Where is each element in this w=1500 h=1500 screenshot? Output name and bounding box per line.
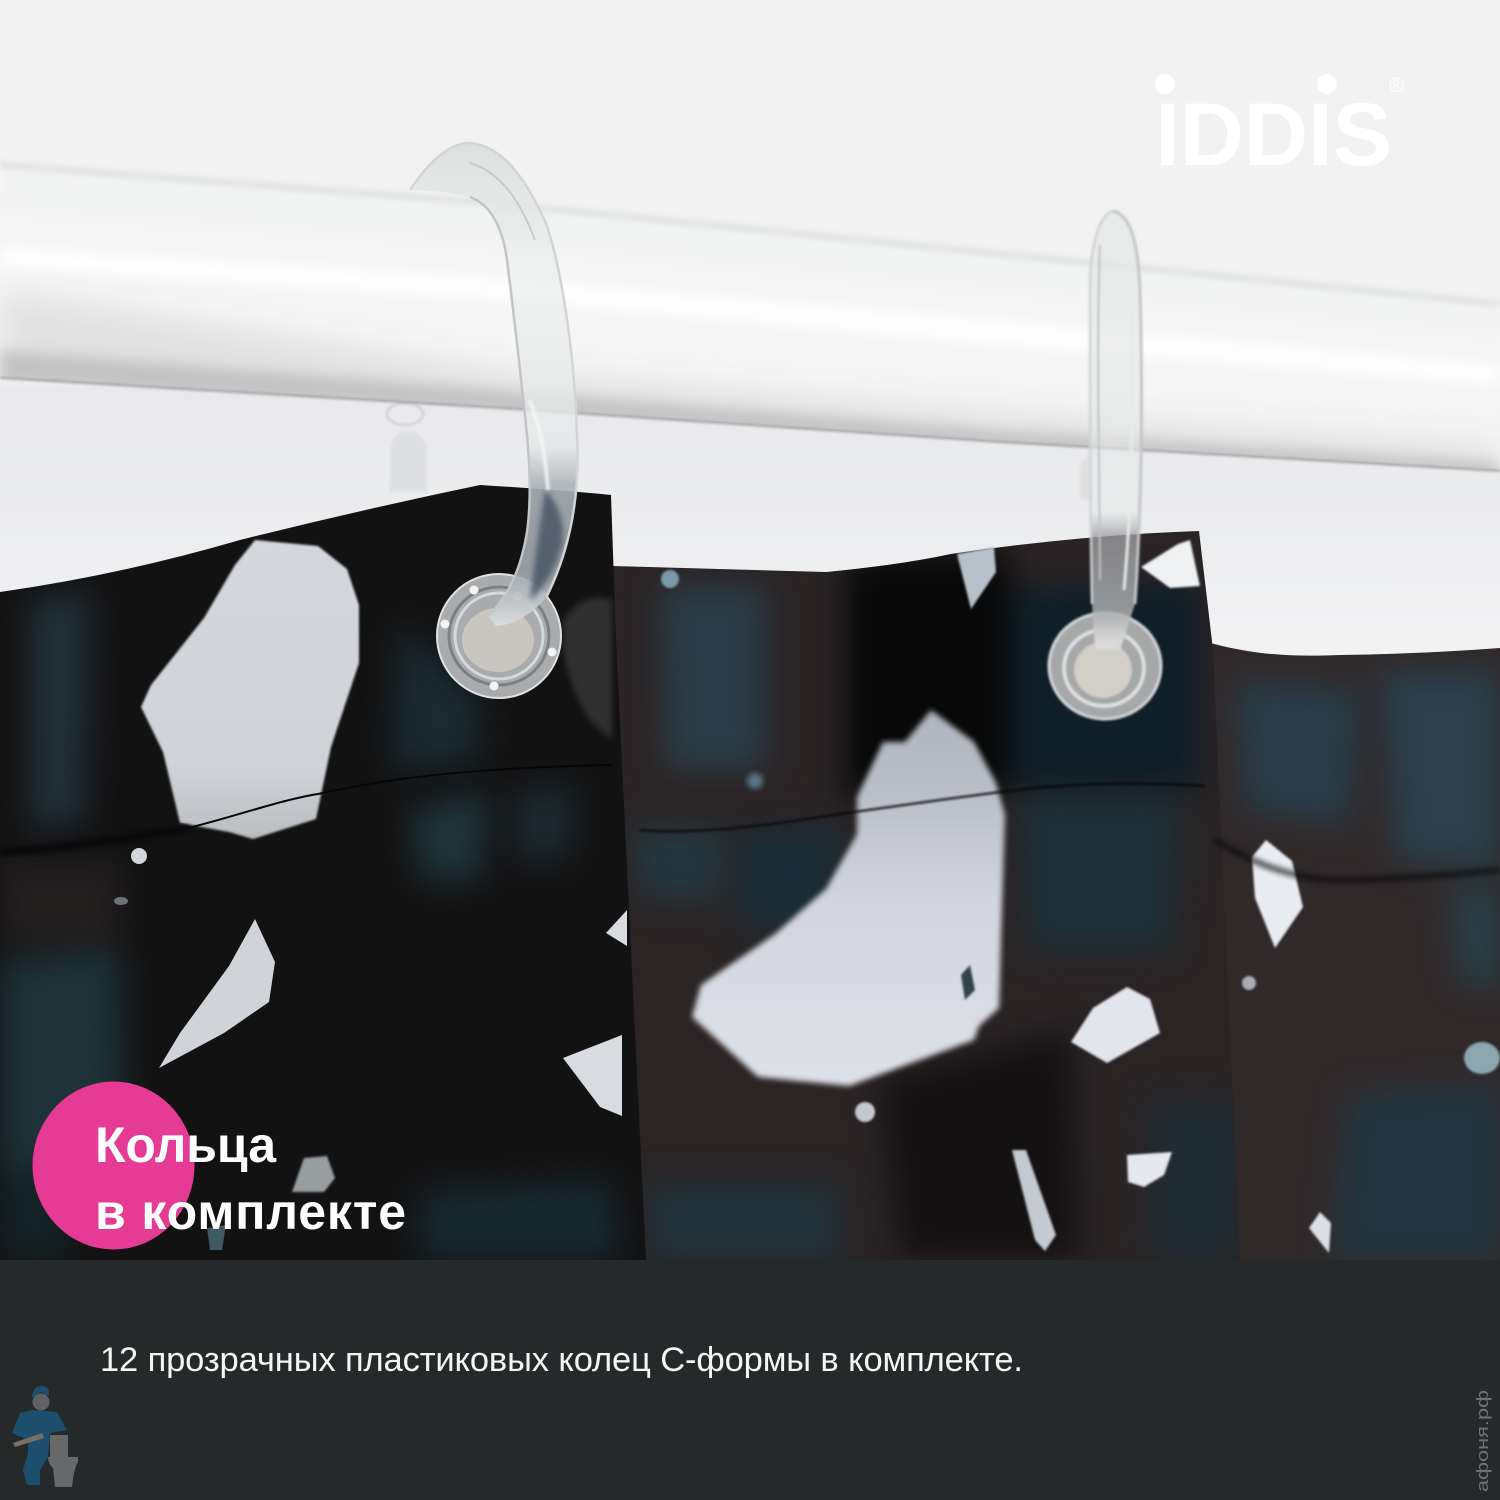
distant ring behind rod [387,403,1090,500]
ring 1: clear plastic tube [410,143,578,626]
curtain panel: centre [612,530,1252,1260]
heading: в комплекте [95,1184,406,1240]
toilet [48,1435,78,1487]
ring 2: eyelet [1049,613,1161,719]
heading [95,1117,406,1240]
terrazzo shapes on left panel [114,540,627,1250]
description text: 12 прозрачных пластиковых колец С-формы в комплекте. [100,1341,1023,1379]
curtain seams [0,765,1500,880]
left panel dark and blue pattern [0,590,620,1260]
grey patch beside eyelet [563,598,612,740]
plumber body [12,1410,67,1485]
rod bottom edge line [0,378,1500,471]
curtain panel: left [0,480,650,1260]
watermark: афоня.рф [1473,1390,1492,1492]
logo: IDDIS: IDDIS [1155,84,1392,184]
rod top edge line [0,165,1500,304]
ring 1: eyelet [437,574,561,698]
right panel blue pattern [1235,670,1500,1260]
centre panel dark and blue pattern [630,550,1240,1260]
terrazzo shapes on centre and right panels [661,540,1500,1253]
curtain panel: right [1200,630,1500,1260]
bottom band [0,1260,1500,1500]
curtain rod [0,250,1500,471]
icon: plumber with toilet [12,1386,78,1487]
ring 2: clear plastic tube [1090,211,1142,650]
pink circle accent [32,1082,194,1250]
logo: IDDIS: ® [1389,75,1404,97]
heading: Кольца [95,1117,277,1173]
